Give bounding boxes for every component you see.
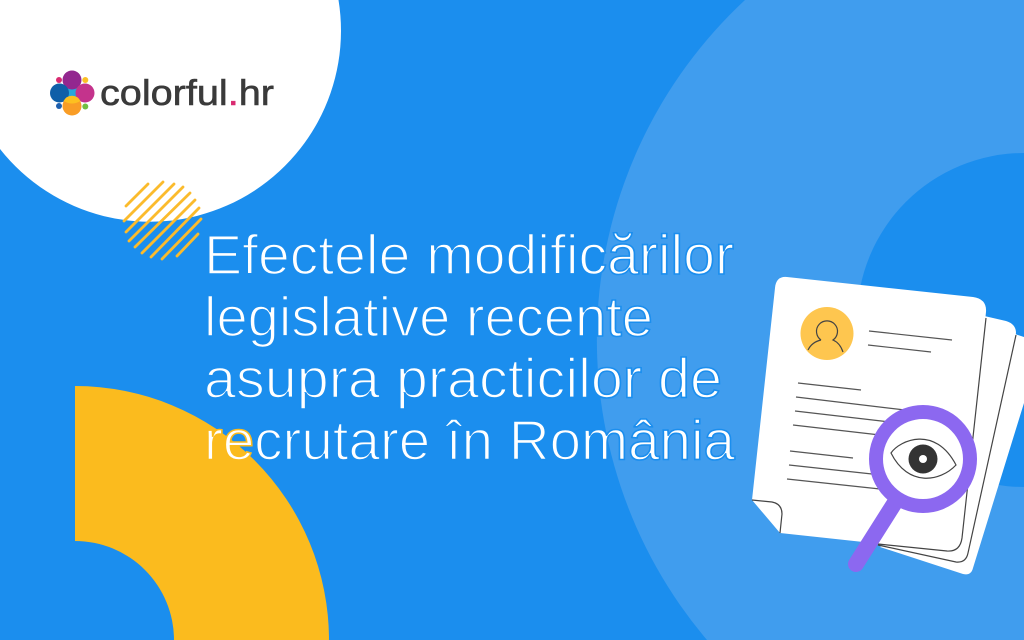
magnifier handle bbox=[856, 504, 894, 564]
title: Efectele modificărilor bbox=[204, 223, 734, 286]
logo wordmark: colorful .hr bbox=[100, 72, 274, 113]
yellow arc shape bbox=[75, 386, 329, 640]
page fold bbox=[752, 500, 782, 533]
title bbox=[204, 223, 736, 472]
large light blue circle bbox=[597, 0, 1024, 640]
logo icon: overlapping circles bbox=[50, 70, 94, 116]
title: asupra practicilor de bbox=[204, 346, 722, 410]
front document sheet bbox=[752, 277, 986, 551]
striped yellow hatch circle bbox=[124, 182, 201, 259]
magnifier lens bbox=[876, 412, 970, 506]
illustration: documents with magnifying glass bbox=[752, 277, 1024, 574]
middle document sheet bbox=[878, 315, 1016, 562]
title: recrutare în România bbox=[204, 408, 736, 472]
magnifying glass bbox=[856, 412, 970, 564]
white circle behind logo bbox=[0, 0, 341, 222]
inner blue circle bbox=[857, 153, 1024, 487]
title: legislative recente bbox=[204, 285, 653, 348]
logo: colorful.hr bbox=[50, 70, 274, 116]
profile avatar icon bbox=[800, 307, 854, 360]
eye icon bbox=[891, 439, 956, 478]
document text lines bbox=[787, 331, 952, 489]
back document sheet bbox=[880, 333, 1024, 574]
